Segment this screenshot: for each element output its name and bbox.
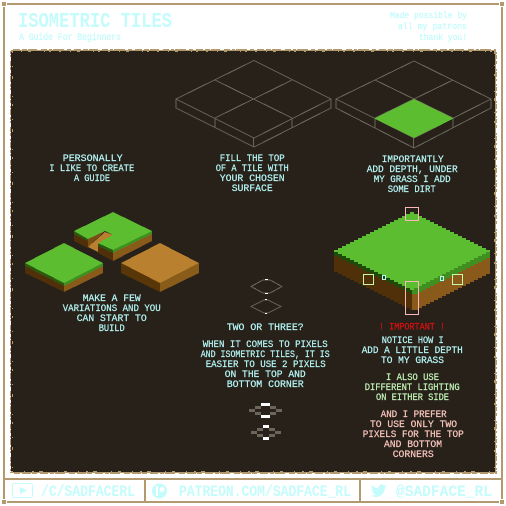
patron thanks: thank you! bbox=[419, 32, 467, 43]
caption: pixels explanation: ON THE TOP AND bbox=[225, 369, 306, 381]
note: depth: NOTICE HOW I bbox=[382, 335, 444, 347]
enlarged pixel corners bbox=[249, 403, 282, 440]
caption: pixels explanation bbox=[201, 339, 330, 391]
note: corners: AND I PREFER bbox=[381, 409, 447, 421]
caption: personally bbox=[49, 153, 134, 185]
caption: pixels explanation: EASIER TO USE 2 PIXELS bbox=[206, 359, 326, 371]
dirt right side bbox=[412, 250, 490, 310]
caption: variations: VARIATIONS AND YOU bbox=[63, 303, 161, 315]
wireframe tile grid bbox=[176, 60, 331, 147]
caption: fill the top: FILL THE TOP bbox=[220, 153, 285, 165]
icon: patreon bbox=[152, 484, 167, 498]
note: depth: TO MY GRASS bbox=[381, 355, 444, 367]
dirt tile bbox=[121, 243, 199, 292]
note: depth bbox=[362, 335, 463, 367]
caption: pixels explanation: BOTTOM CORNER bbox=[227, 379, 304, 391]
caption: variations: MAKE A FEW bbox=[83, 293, 141, 305]
caption: pixels explanation: WHEN IT COMES TO PIXELS bbox=[203, 339, 328, 351]
green surface bbox=[374, 99, 454, 138]
caption: variations: BUILD bbox=[99, 323, 125, 335]
caption: pixels explanation: AND ISOMETRIC TILES, IT IS bbox=[201, 349, 330, 361]
note: corners: PIXELS FOR THE TOP bbox=[363, 429, 464, 441]
caption: importantly bbox=[367, 154, 458, 196]
cyan depth markers bbox=[382, 276, 444, 280]
dirt left side bbox=[334, 250, 412, 310]
caption: variations bbox=[63, 293, 161, 335]
note: corners: AND BOTTOM bbox=[384, 439, 442, 451]
note: corners: TO USE ONLY TWO bbox=[370, 419, 457, 431]
note: corners bbox=[363, 409, 464, 461]
patron thanks: Made possible by bbox=[390, 10, 467, 21]
small diamonds with two and three pixel corners bbox=[251, 279, 282, 314]
patreon link: PATREON.COM/SADFACE_RL bbox=[179, 483, 351, 501]
large grass tile with markers bbox=[334, 208, 490, 314]
caption: fill the top bbox=[216, 153, 289, 195]
grass tile with path bbox=[74, 212, 152, 261]
grass tile bbox=[25, 243, 103, 292]
caption: fill the top: OF A TILE WITH bbox=[216, 163, 289, 175]
patron thanks bbox=[390, 10, 467, 43]
caption: importantly: ADD DEPTH, UNDER bbox=[367, 164, 458, 176]
note: lighting: DIFFERENT LIGHTING bbox=[365, 382, 460, 394]
title: ISOMETRIC TILES bbox=[18, 11, 172, 34]
icon: twitter bbox=[371, 484, 386, 497]
note: lighting: I ALSO USE bbox=[386, 372, 439, 384]
important heading: ! IMPORTANT ! bbox=[379, 322, 445, 334]
caption: variations: CAN START TO bbox=[77, 313, 147, 325]
pink corner markers bbox=[406, 208, 418, 314]
caption: personally: A GUIDE bbox=[74, 173, 110, 185]
youtube handle: /C/SADFACERL bbox=[41, 483, 135, 501]
wireframe tile with green surface bbox=[336, 61, 491, 148]
caption: fill the top: SURFACE bbox=[232, 183, 273, 195]
dark grass edge bbox=[334, 250, 412, 294]
note: lighting: ON EITHER SIDE bbox=[376, 392, 449, 404]
subtitle: A Guide For Beginners bbox=[19, 32, 121, 44]
caption: importantly: MY GRASS I ADD bbox=[374, 174, 451, 186]
note: corners: CORNERS bbox=[393, 449, 434, 461]
caption: personally: PERSONALLY bbox=[63, 153, 123, 165]
lit grass edge bbox=[412, 250, 490, 294]
tile variations bbox=[25, 212, 199, 292]
caption: importantly: IMPORTANTLY bbox=[382, 154, 444, 166]
note: depth: ADD A LITTLE DEPTH bbox=[362, 345, 463, 357]
twitter handle: @SADFACE_RL bbox=[396, 483, 492, 501]
caption: two or three: TWO OR THREE? bbox=[227, 322, 304, 334]
grass top bbox=[334, 212, 490, 290]
caption: importantly: SOME DIRT bbox=[388, 184, 436, 196]
green lighting markers bbox=[364, 274, 462, 284]
note: lighting bbox=[365, 372, 460, 404]
patron thanks: all my patrons bbox=[398, 21, 467, 32]
caption: personally: I LIKE TO CREATE bbox=[49, 163, 134, 175]
caption: fill the top: YOUR CHOSEN bbox=[220, 173, 285, 185]
icon: youtube bbox=[12, 484, 32, 498]
